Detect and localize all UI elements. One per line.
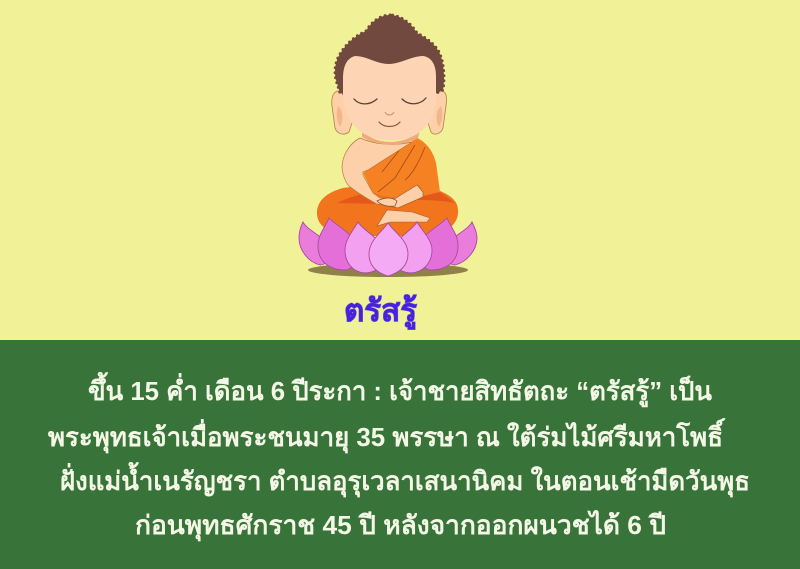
right forearm xyxy=(384,185,423,208)
back right petal xyxy=(445,222,477,265)
left closed eye xyxy=(354,99,377,104)
seated legs and robe xyxy=(317,182,458,236)
panel: yellow background xyxy=(0,0,800,340)
nose xyxy=(385,112,394,115)
title: ตรัสรู้ xyxy=(344,293,417,330)
left shoulder and arm xyxy=(342,138,412,207)
back left petal xyxy=(299,222,330,265)
robe folds xyxy=(378,143,425,192)
body text xyxy=(48,371,750,542)
inner ear tint right xyxy=(437,106,442,127)
robe fold shadow right xyxy=(408,192,455,203)
folded hands xyxy=(377,198,397,206)
face xyxy=(343,56,436,140)
left ear xyxy=(332,91,353,134)
illustration: meditating Buddha on lotus xyxy=(299,15,477,277)
crossed foot xyxy=(377,210,430,226)
right ear xyxy=(427,91,446,134)
third right petal xyxy=(391,222,432,273)
centre petal xyxy=(369,223,408,276)
third left petal xyxy=(345,222,385,273)
smile xyxy=(379,122,400,126)
hair xyxy=(335,15,444,96)
text line 3: ฝั่งแม่น้ำเนรัญชรา ตำบลอุรุเวลาเสนานิคม ในตอนเช้ามืดวันพุธ xyxy=(60,461,750,498)
robe fold shadow xyxy=(337,193,380,204)
text line 1: ขึ้น 15 ค่ำ เดือน 6 ปีระกา : เจ้าชายสิทธัตถะ “ตรัสรู้” เป็น xyxy=(88,371,712,408)
neck shadow xyxy=(362,130,420,145)
text line 2: พระพุทธเจ้าเมื่อพระชนมายุ 35 พรรษา ณ ใต้ร่มไม้ศรีมหาโพธิ์ xyxy=(48,417,725,454)
inner ear tint xyxy=(337,106,342,127)
text line 4: ก่อนพุทธศักราช 45 ปี หลังจากออกผนวชได้ 6 ปี xyxy=(135,509,666,542)
panel: green text background xyxy=(0,340,800,569)
right closed eye xyxy=(402,98,426,104)
lotus petals xyxy=(299,218,477,276)
torso robe xyxy=(363,138,440,200)
lotus shadow xyxy=(308,263,468,277)
second left petal xyxy=(318,218,358,270)
second right petal xyxy=(418,218,458,270)
